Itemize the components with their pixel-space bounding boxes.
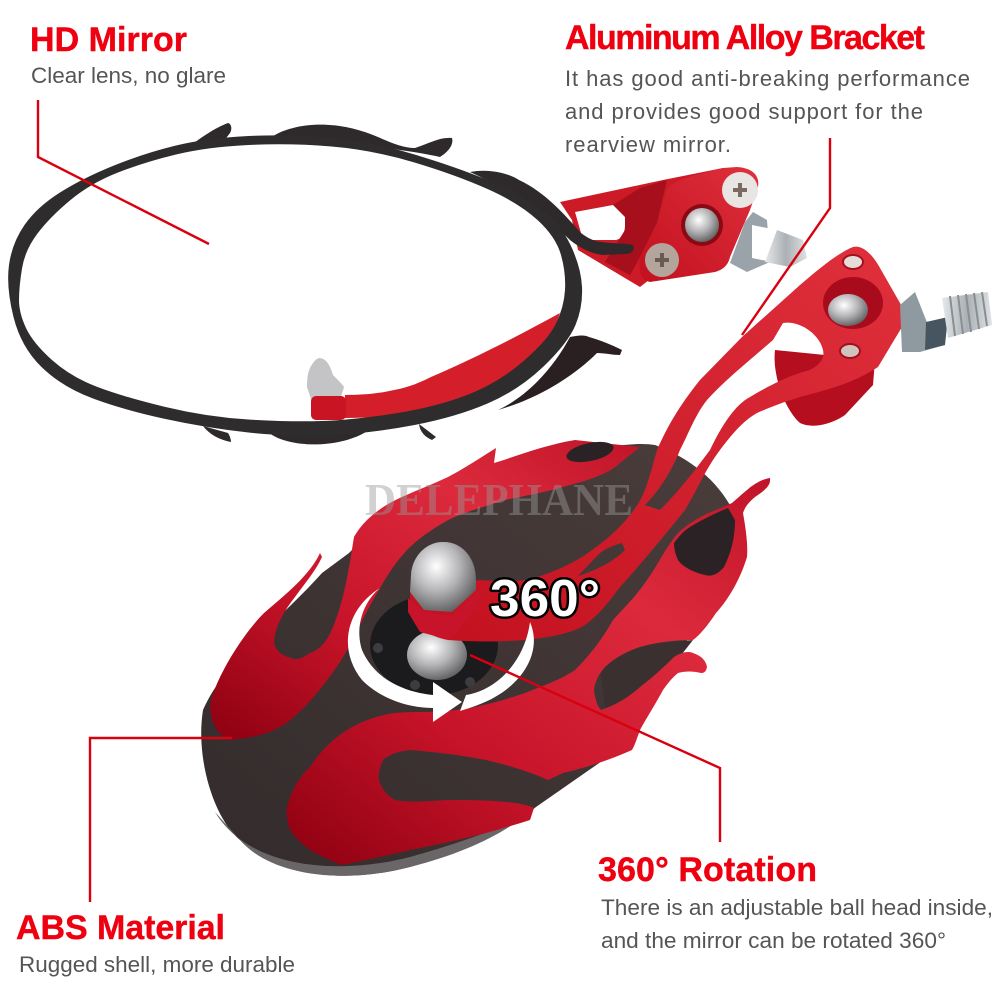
callout: HD Mirror	[30, 21, 226, 88]
360 degree badge: 360°	[490, 570, 600, 628]
panel: flame mirror back	[201, 438, 770, 876]
upper flame slot	[565, 438, 615, 466]
bolt	[730, 212, 770, 272]
threaded bolt and nut	[900, 292, 992, 352]
callout: Aluminum Alloy Bracket	[565, 19, 970, 157]
shell base highlight	[215, 807, 536, 876]
callout line: rotation	[470, 655, 720, 842]
callout line: ABS	[90, 738, 232, 902]
upper mirror bracket	[560, 167, 807, 287]
main lower flame	[287, 478, 770, 865]
left and top flame	[210, 440, 640, 740]
forked aluminum arm	[410, 247, 908, 642]
callout: 360 Rotation	[598, 851, 993, 953]
callout line: HD mirror	[38, 100, 209, 244]
mirror frame ring	[8, 135, 582, 436]
heading: HD Mirror	[30, 21, 187, 59]
mirror nut	[307, 358, 346, 420]
description: and the mirror can be rotated 360°	[601, 928, 946, 953]
central mount disc	[370, 595, 498, 695]
notch shadow	[600, 640, 693, 714]
description: rearview mirror.	[565, 132, 731, 157]
heading: Aluminum Alloy Bracket	[565, 19, 925, 57]
lower mirror bracket	[344, 313, 560, 418]
mirror body shell	[201, 444, 745, 876]
arm pivot cylinder	[775, 350, 875, 426]
description: and provides good support for the	[565, 99, 923, 124]
callout line: bracket	[742, 138, 830, 335]
description: Rugged shell, more durable	[19, 952, 295, 977]
icon: rotation arrow	[348, 588, 534, 722]
callout: ABS Material	[16, 909, 295, 977]
panel: rear-view mirror	[8, 123, 807, 444]
description: There is an adjustable ball head inside,	[601, 895, 993, 920]
panel: adjustable arm	[408, 247, 992, 642]
mirror spiked fins	[191, 123, 634, 444]
description	[565, 66, 970, 157]
heading: ABS Material	[16, 909, 225, 947]
flame dark hole	[674, 508, 735, 576]
plate holes	[823, 255, 883, 358]
description: Clear lens, no glare	[31, 63, 226, 88]
heading: 360° Rotation	[598, 851, 817, 889]
cap nut	[408, 542, 478, 640]
watermark: DELEPHANE	[365, 474, 633, 525]
description: It has good anti-breaking performance	[565, 66, 970, 91]
description	[601, 895, 993, 953]
